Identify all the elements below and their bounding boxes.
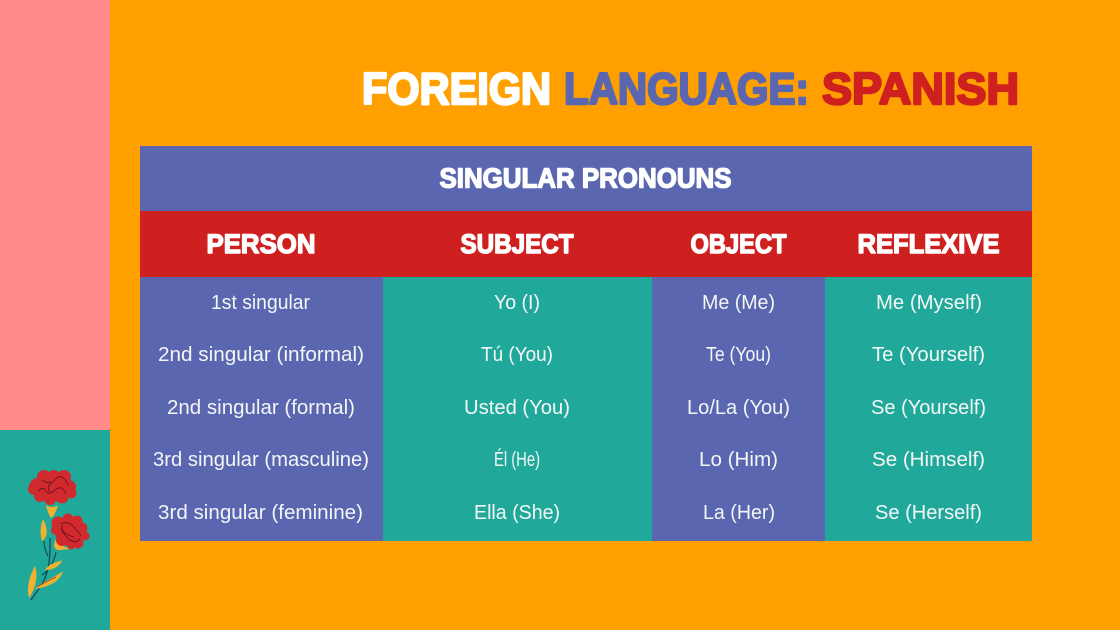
- column: person: [140, 277, 383, 541]
- column: reflexive: Me (Myself): [876, 292, 982, 314]
- column: reflexive: Se (Yourself): [871, 397, 986, 419]
- column headers: REFLEXIVE: [858, 229, 1000, 259]
- panel: teal sidebar: [0, 430, 110, 630]
- column headers: PERSON: [206, 229, 316, 259]
- column: reflexive: Te (Yourself): [872, 344, 985, 366]
- icon: red carnation flowers: [28, 470, 89, 600]
- column headers: SUBJECT: [460, 229, 574, 259]
- column: person: 1st singular: [211, 292, 310, 314]
- column: subject: Tú (You): [481, 344, 553, 366]
- column: reflexive: [825, 277, 1032, 541]
- column: subject: Él (He): [494, 448, 540, 471]
- column: object: La (Her): [703, 502, 775, 524]
- column: object: Lo/La (You): [687, 397, 790, 419]
- column: person: 3rd singular (masculine): [153, 449, 369, 471]
- title: FOREIGN: [362, 65, 551, 114]
- table: singular pronouns: [140, 146, 1032, 541]
- column: reflexive: Se (Himself): [872, 449, 985, 471]
- column: subject: [383, 277, 652, 541]
- panel: pink sidebar: [0, 0, 110, 430]
- column: person: 3rd singular (feminine): [158, 502, 363, 524]
- title: LANGUAGE:: [564, 65, 809, 114]
- column: person: 2nd singular (informal): [158, 344, 364, 366]
- title: [362, 65, 1019, 114]
- column: person: 2nd singular (formal): [167, 397, 355, 419]
- column: object: Te (You): [706, 344, 771, 366]
- title: SPANISH: [822, 65, 1019, 114]
- column: reflexive: Se (Herself): [875, 502, 982, 524]
- column: subject: Usted (You): [464, 397, 570, 419]
- column headers: [140, 211, 1032, 277]
- column headers: OBJECT: [690, 229, 787, 259]
- table heading band: [140, 146, 1032, 211]
- column: object: [652, 277, 825, 541]
- table heading band: SINGULAR PRONOUNS: [440, 162, 732, 194]
- column: object: Me (Me): [702, 292, 775, 314]
- column: subject: Ella (She): [474, 502, 560, 524]
- column: subject: Yo (I): [494, 292, 540, 314]
- column: object: Lo (Him): [699, 449, 778, 471]
